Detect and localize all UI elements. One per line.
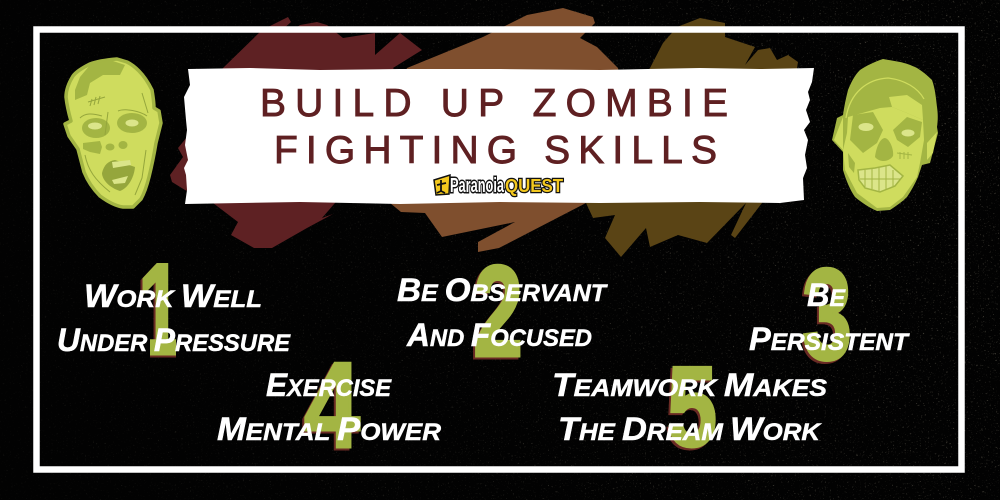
ears [834,117,843,150]
label [397,272,608,353]
number 5: 5 [665,346,715,473]
number 1: 1 [138,236,182,382]
title text [260,82,728,172]
hair patch [75,60,125,100]
label: PERSISTENT [749,321,910,357]
skill 3 [749,241,910,389]
skill 2 [397,238,608,386]
label [552,367,827,447]
number 3: 3 [802,241,852,387]
number 4: 4 [302,339,358,475]
label: EXERCISE [266,367,392,403]
label: MENTAL POWER [217,411,442,447]
skill 1 [58,263,291,358]
paint stroke: olive [586,18,800,257]
number 2: 2 [471,240,521,386]
face [843,107,924,208]
mouth [102,160,135,191]
paint stroke: dark red [170,17,422,248]
zombie head: right [832,59,938,211]
eye sockets and eyes [850,112,883,153]
label [57,278,291,358]
eye sockets and eyes [82,118,110,138]
label [749,277,910,357]
label: THE DREAM WORK [558,411,822,447]
wrinkles [80,93,148,195]
nose [106,144,114,150]
torn white banner [184,68,814,204]
cheek shadow [848,153,855,173]
skill 5 [552,344,827,473]
title text: BUILD UP ZOMBIE [260,82,728,125]
zombie head: left [65,59,161,207]
number 3: 3 [800,243,850,389]
label: BE [807,277,846,313]
title text: FIGHTING SKILLS [274,129,717,172]
number 1: 1 [136,238,180,384]
label [217,367,442,447]
title banner [184,68,814,204]
label: UNDER PRESSURE [57,322,291,358]
logo: Paranoia Quest: QUEST [505,176,563,196]
number 4: 4 [304,337,360,473]
paint stroke: brown [380,8,630,252]
brow highlight [889,95,923,120]
label: WORK WELL [84,278,262,314]
nose [875,138,893,161]
label: AND FOCUSED [406,317,592,353]
number 2: 2 [473,238,523,384]
label: TEAMWORK MAKES [552,367,827,403]
cheek patch [83,141,102,154]
number 5: 5 [667,344,717,471]
logo: Paranoia Quest [434,175,563,197]
stitches [88,96,105,106]
logo: Paranoia Quest: Paranoia [450,175,505,197]
number 1 [140,263,176,358]
skull cap highlight [846,78,924,118]
label: BE OBSERVANT [397,272,608,308]
skill 4 [217,337,442,475]
teeth [858,165,903,192]
